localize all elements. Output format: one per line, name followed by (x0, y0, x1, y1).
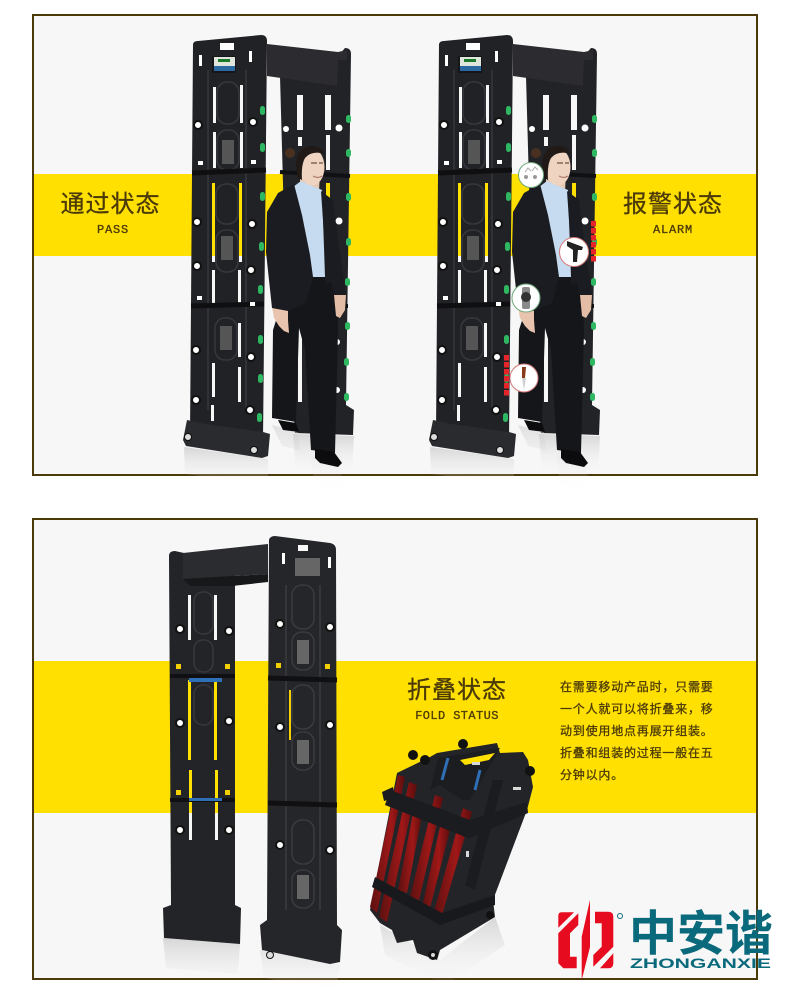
icon: earrings detected (518, 162, 544, 188)
alarm state gate with person (429, 35, 600, 490)
description text: 动到使用地点再展开组装。 (560, 723, 714, 738)
heading: fold state: 折叠状态 (407, 677, 507, 704)
panel: pass and alarm states (33, 15, 757, 490)
icon: handgun detected (560, 238, 588, 266)
description text (560, 680, 714, 782)
icon: watch detected (512, 284, 540, 312)
folded gate strapped (370, 739, 535, 985)
logo: ZHONGANXIE: ZHONGANXIE (630, 955, 771, 971)
description text: 在需要移动产品时，只需要 (560, 680, 714, 694)
heading: pass state (60, 191, 160, 237)
logo: ZHONGANXIE (558, 900, 773, 980)
wordmark: 中安谐 (629, 908, 773, 961)
heading: pass state: PASS (97, 223, 129, 237)
panel: fold state (33, 519, 757, 990)
icon: knife detected (510, 364, 538, 392)
heading: alarm state: ALARM (653, 223, 693, 237)
description text: 折叠和组装的过程一般在五 (560, 745, 714, 760)
description text: 一个人就可以将折叠来，移 (560, 701, 714, 716)
icon: logo mark (558, 900, 613, 980)
alarm LEDs on gate (504, 221, 596, 396)
heading: alarm state (623, 191, 723, 237)
description text: 分钟以内。 (560, 767, 624, 782)
pass state gate with person (183, 35, 354, 490)
heading: fold state (407, 677, 507, 723)
heading: alarm state: 报警状态 (623, 191, 723, 218)
folding gate, unfolded view (163, 536, 342, 990)
heading: pass state: 通过状态 (60, 191, 160, 218)
heading: fold state: FOLD STATUS (415, 709, 499, 723)
